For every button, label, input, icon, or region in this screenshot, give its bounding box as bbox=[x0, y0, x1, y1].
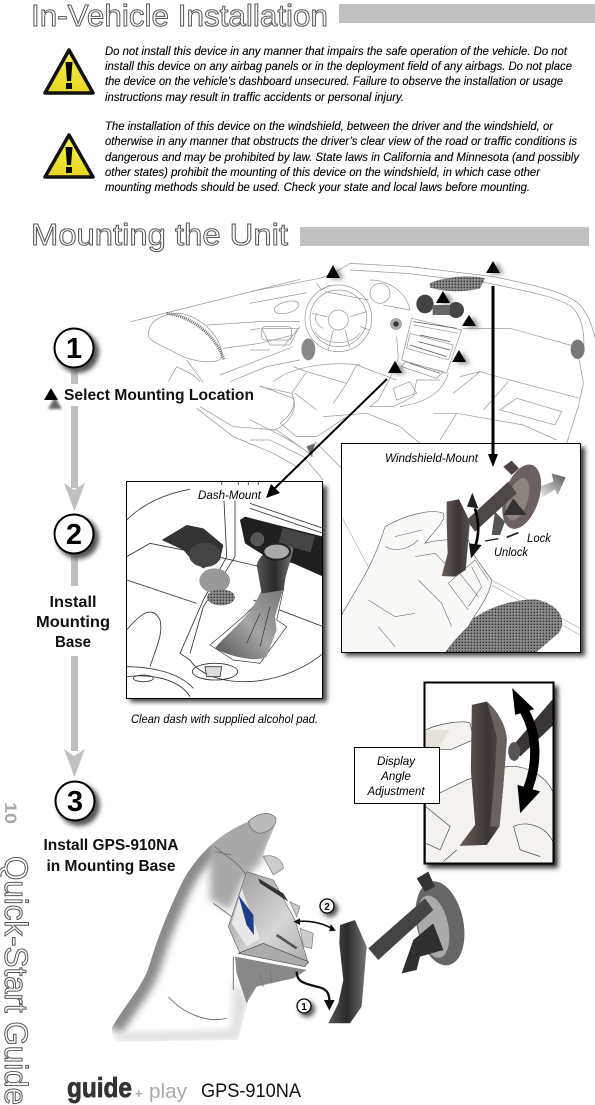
step 2 label: Mounting bbox=[36, 614, 110, 631]
step 3 badge bbox=[56, 782, 100, 826]
white label backing bbox=[195, 487, 263, 501]
panel: display angle bbox=[424, 682, 558, 868]
callout: display angle adjustment bbox=[354, 748, 440, 804]
dashboard left part bbox=[131, 279, 300, 468]
warning text 1: install this device on any airbag panels or in the deployment field of any airbags. Do not place bbox=[105, 60, 573, 73]
hand creases bbox=[168, 847, 272, 1020]
arrow 2 bbox=[297, 921, 333, 929]
suction mount bbox=[408, 877, 472, 970]
arrow: to windshield mount bbox=[488, 286, 498, 467]
logo: guide + play: guide bbox=[67, 1072, 132, 1103]
dashboard right part bbox=[250, 263, 595, 480]
thumb nail bbox=[248, 814, 276, 833]
heading bar bbox=[339, 4, 595, 23]
step 2 badge bbox=[54, 514, 99, 559]
gray direction arrow bbox=[540, 473, 566, 497]
step 3 label: Install GPS-910NA bbox=[44, 837, 179, 854]
arrow: to dash mount bbox=[266, 379, 387, 498]
windshield label: Windshield-Mount bbox=[385, 452, 479, 465]
callout number 2 bbox=[320, 899, 338, 917]
GPS device bbox=[228, 872, 308, 965]
logo: guide + play bbox=[67, 1072, 187, 1103]
fingers bbox=[263, 856, 313, 948]
arrow 1 bbox=[297, 972, 329, 1003]
step 3 label bbox=[44, 837, 179, 875]
warning icon 2 bbox=[45, 135, 93, 177]
display angle photo bbox=[426, 688, 552, 862]
warning text 1: the device on the vehicle’s dashboard unsecured. Failure to observe the installation or usage bbox=[105, 75, 564, 88]
step 3 badge: 3 bbox=[67, 786, 83, 818]
centre vents and details bbox=[390, 277, 585, 359]
location markers on car bbox=[326, 261, 504, 374]
heading: Mounting the Unit bbox=[31, 217, 589, 252]
up/down arrow bbox=[474, 508, 478, 548]
warning text 2: dangerous and may be prohibited by law. State laws in California and Minnesota (and possibly bbox=[105, 151, 580, 164]
panel: windshield mount bbox=[342, 444, 585, 656]
page number: 10 bbox=[1, 802, 20, 824]
heading: In-Vehicle Installation bbox=[31, 0, 595, 33]
callout: display angle adjustment: Angle bbox=[380, 770, 411, 783]
callout: display angle adjustment: Display bbox=[377, 755, 416, 768]
hand edge shading bbox=[112, 822, 248, 1028]
dash mount photo bbox=[127, 482, 322, 697]
step 2 badge: 2 bbox=[66, 519, 82, 551]
logo: guide + play: play bbox=[149, 1081, 187, 1103]
heading: Mounting the Unit: Mounting the Unit bbox=[31, 217, 288, 252]
callout: display angle adjustment: Adjustment bbox=[367, 785, 425, 798]
warning icon 1 bbox=[45, 50, 93, 93]
hand bbox=[342, 512, 492, 653]
step 2 label: Base bbox=[55, 634, 91, 651]
warning text 2: The installation of this device on the windshield, between the driver and the windshield, or bbox=[105, 120, 554, 133]
warning text 2: mounting methods should be used. Check your state and local laws before mounting. bbox=[105, 181, 530, 194]
warning text 2: other states) prohibit the mounting of this device on the windshield, in which case other bbox=[105, 166, 541, 179]
display holder bbox=[328, 920, 367, 1023]
warning text 1: Do not install this device in any manner that impairs the safe operation of the vehicle. Do not bbox=[105, 45, 568, 58]
gear boot bbox=[210, 590, 287, 663]
display block bbox=[442, 499, 470, 577]
callout number 1 bbox=[297, 999, 315, 1017]
mount bbox=[162, 525, 223, 568]
step 2 label bbox=[36, 594, 110, 651]
lock arrows bbox=[485, 539, 498, 541]
curved double arrow bbox=[522, 706, 535, 795]
hand bbox=[112, 822, 306, 1042]
step 1 badge: 1 bbox=[66, 333, 82, 365]
heading bar bbox=[300, 227, 589, 246]
warning text 2 bbox=[105, 120, 580, 194]
radio console bbox=[240, 517, 323, 577]
step flow line bbox=[64, 360, 85, 777]
warning text 1 bbox=[105, 45, 573, 104]
suction cup bbox=[495, 460, 548, 534]
mesh panel bbox=[440, 599, 562, 653]
step 1 label: Select Mounting Location bbox=[64, 387, 254, 404]
logo: guide + play: + bbox=[135, 1086, 143, 1101]
step 1 label bbox=[44, 384, 258, 409]
marker shadows bbox=[330, 262, 504, 374]
arm bbox=[467, 482, 517, 532]
illustration: hand inserting GPS into mount bbox=[112, 813, 464, 1042]
warning text 2: otherwise in any manner that obstructs the driver’s clear view of the road or traffic conditions is bbox=[105, 135, 577, 148]
callout number 1: 1 bbox=[301, 1002, 307, 1013]
car interior line drawing bbox=[131, 263, 595, 480]
unlock label: Unlock bbox=[494, 546, 529, 559]
step 1 badge bbox=[54, 328, 99, 373]
callout number 2: 2 bbox=[324, 902, 330, 913]
lock label: Lock bbox=[527, 532, 552, 545]
panel: dash mount bbox=[126, 482, 327, 702]
model name: GPS-910NA bbox=[201, 1081, 301, 1102]
step 2 label: Install bbox=[50, 594, 96, 611]
step 3 label: in Mounting Base bbox=[46, 858, 176, 875]
warning text 1: instructions may result in traffic accidents or personal injury. bbox=[105, 91, 404, 104]
dash mount caption: Dash-Mount bbox=[198, 489, 262, 502]
caption: clean dash: Clean dash with supplied alcohol pad. bbox=[131, 713, 318, 726]
markers bbox=[326, 261, 500, 373]
windshield mount photo bbox=[342, 460, 580, 652]
